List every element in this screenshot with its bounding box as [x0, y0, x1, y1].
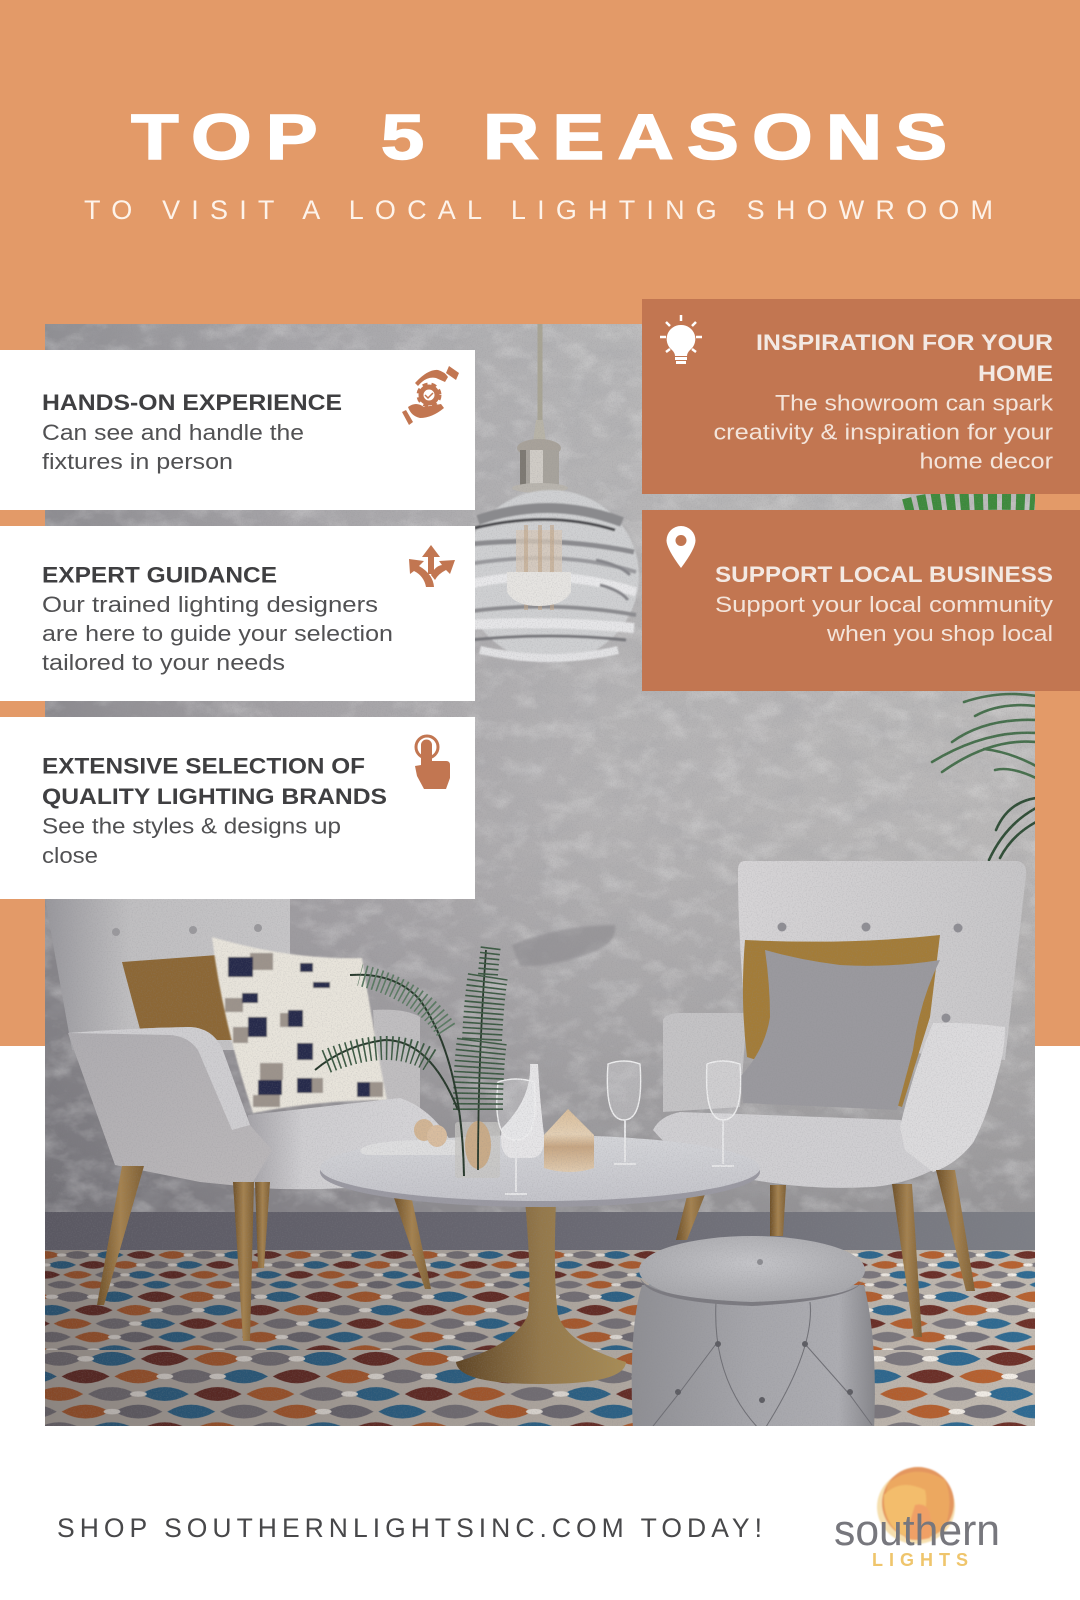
panel: hands-on experience: [0, 350, 475, 510]
table decor: [360, 1061, 741, 1194]
ottoman: [632, 1236, 875, 1430]
logo: Southern Lights: southern: [834, 1506, 1000, 1555]
heading: HANDS-ON EXPERIENCE: [42, 390, 342, 415]
left chair legs: [97, 1166, 431, 1341]
icon: hands and gear: [402, 366, 459, 425]
body text: See the styles & designs up: [42, 814, 341, 838]
body text: [42, 592, 393, 675]
title: REASONS: [483, 102, 960, 173]
title: TOP: [131, 102, 331, 173]
chair arm: [68, 1027, 272, 1187]
title: 5: [381, 102, 424, 173]
body text: [42, 814, 341, 868]
body text: [715, 592, 1053, 646]
panel: extensive selection: [0, 717, 475, 899]
body text: [714, 390, 1054, 474]
chair seat: [240, 1098, 450, 1189]
round table: [320, 1135, 760, 1384]
body text: when you shop local: [826, 621, 1053, 646]
wall plant fronds: [905, 499, 1036, 860]
icon: diverging arrows: [409, 545, 455, 587]
pendant lamp: [462, 324, 639, 662]
heading: EXTENSIVE SELECTION OF: [42, 754, 365, 778]
heading: HOME: [978, 361, 1053, 386]
right chair legs: [676, 1170, 975, 1337]
orange background block: [0, 0, 1080, 1046]
body text: home decor: [920, 448, 1053, 474]
heading: SUPPORT LOCAL BUSINESS: [715, 562, 1053, 587]
icon: pointing hand: [415, 736, 450, 789]
gold cushion: [122, 955, 240, 1040]
body text: close: [42, 843, 98, 868]
chair arm: [900, 1023, 1005, 1172]
body text: fixtures in person: [42, 449, 233, 474]
body text: creativity & inspiration for your: [714, 420, 1053, 444]
panel: inspiration: [642, 299, 1080, 494]
call to action: SHOP SOUTHERNLIGHTSINC.COM TODAY!: [57, 1513, 766, 1543]
panel: support local: [642, 510, 1080, 691]
body text: tailored to your needs: [42, 650, 285, 675]
wall: [45, 324, 1035, 1224]
photo: living room scene: [45, 324, 1036, 1430]
body text: Can see and handle the: [42, 420, 304, 445]
plaid pillow: [212, 937, 387, 1113]
heading: EXPERT GUIDANCE: [42, 562, 277, 588]
body text: [42, 420, 304, 474]
right armchair: [653, 861, 1026, 1188]
grey pillow: [740, 950, 940, 1110]
panel: expert guidance: [0, 526, 475, 701]
subtitle: TO VISIT A LOCAL LIGHTING SHOWROOM: [84, 195, 1005, 225]
body text: are here to guide your selection: [42, 621, 393, 646]
icon: map pin: [666, 526, 696, 568]
left armchair: [45, 899, 450, 1189]
gold cushion: [743, 935, 940, 1107]
tiled floor: [45, 1250, 1035, 1426]
heading: INSPIRATION FOR YOUR: [756, 330, 1053, 355]
icon: light bulb: [660, 315, 702, 364]
body text: The showroom can spark: [775, 390, 1054, 416]
table palm fronds: [315, 945, 491, 1176]
photo grain: [45, 324, 1035, 1426]
baseboard: [45, 1212, 1035, 1250]
chair seat: [653, 1112, 933, 1188]
heading: [756, 330, 1053, 386]
heading: QUALITY LIGHTING BRANDS: [42, 784, 387, 809]
heading: [42, 754, 387, 809]
body text: Our trained lighting designers: [42, 592, 378, 617]
logo: Southern Lights: LIGHTS: [872, 1550, 968, 1570]
logo: Southern Lights: [834, 1467, 1000, 1570]
body text: Support your local community: [715, 592, 1053, 617]
